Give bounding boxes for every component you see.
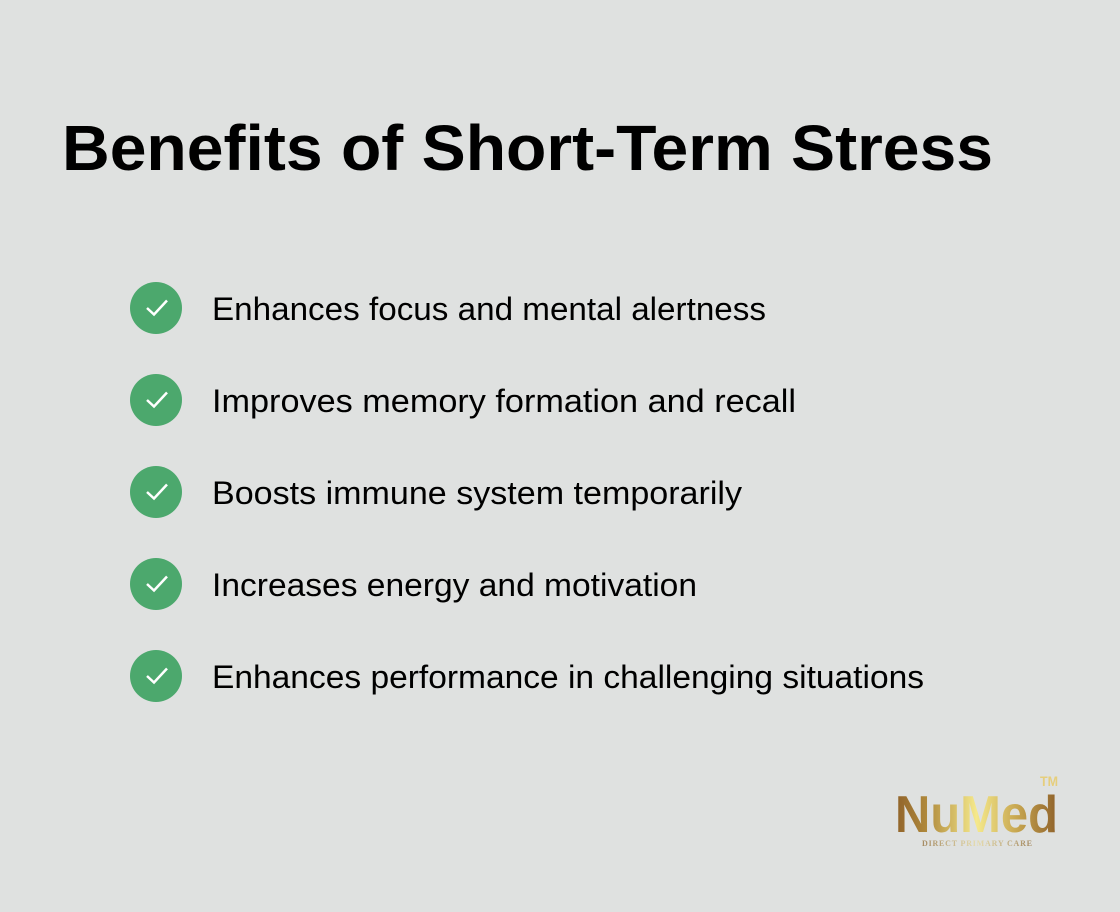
benefit 4: Increases energy and motivation xyxy=(212,567,697,603)
logo: NuMed: DIRECT PRIMARY CARE xyxy=(922,839,1032,848)
benefits list xyxy=(130,282,924,702)
benefit 1 xyxy=(130,282,766,334)
benefit 5: Enhances performance in challenging situations xyxy=(212,659,924,695)
benefit 3: Boosts immune system temporarily xyxy=(212,475,742,511)
benefit 2 xyxy=(130,374,796,426)
benefit 5 xyxy=(130,650,924,702)
benefit 4 xyxy=(130,558,697,610)
benefit 3 xyxy=(130,466,742,518)
benefit 2: Improves memory formation and recall xyxy=(212,383,796,419)
logo: NuMed: TM xyxy=(1040,773,1058,789)
benefit 1: Enhances focus and mental alertness xyxy=(212,291,766,327)
title: Benefits of Short-Term Stress xyxy=(62,112,993,184)
logo: NuMed: NuMed xyxy=(895,786,1058,844)
